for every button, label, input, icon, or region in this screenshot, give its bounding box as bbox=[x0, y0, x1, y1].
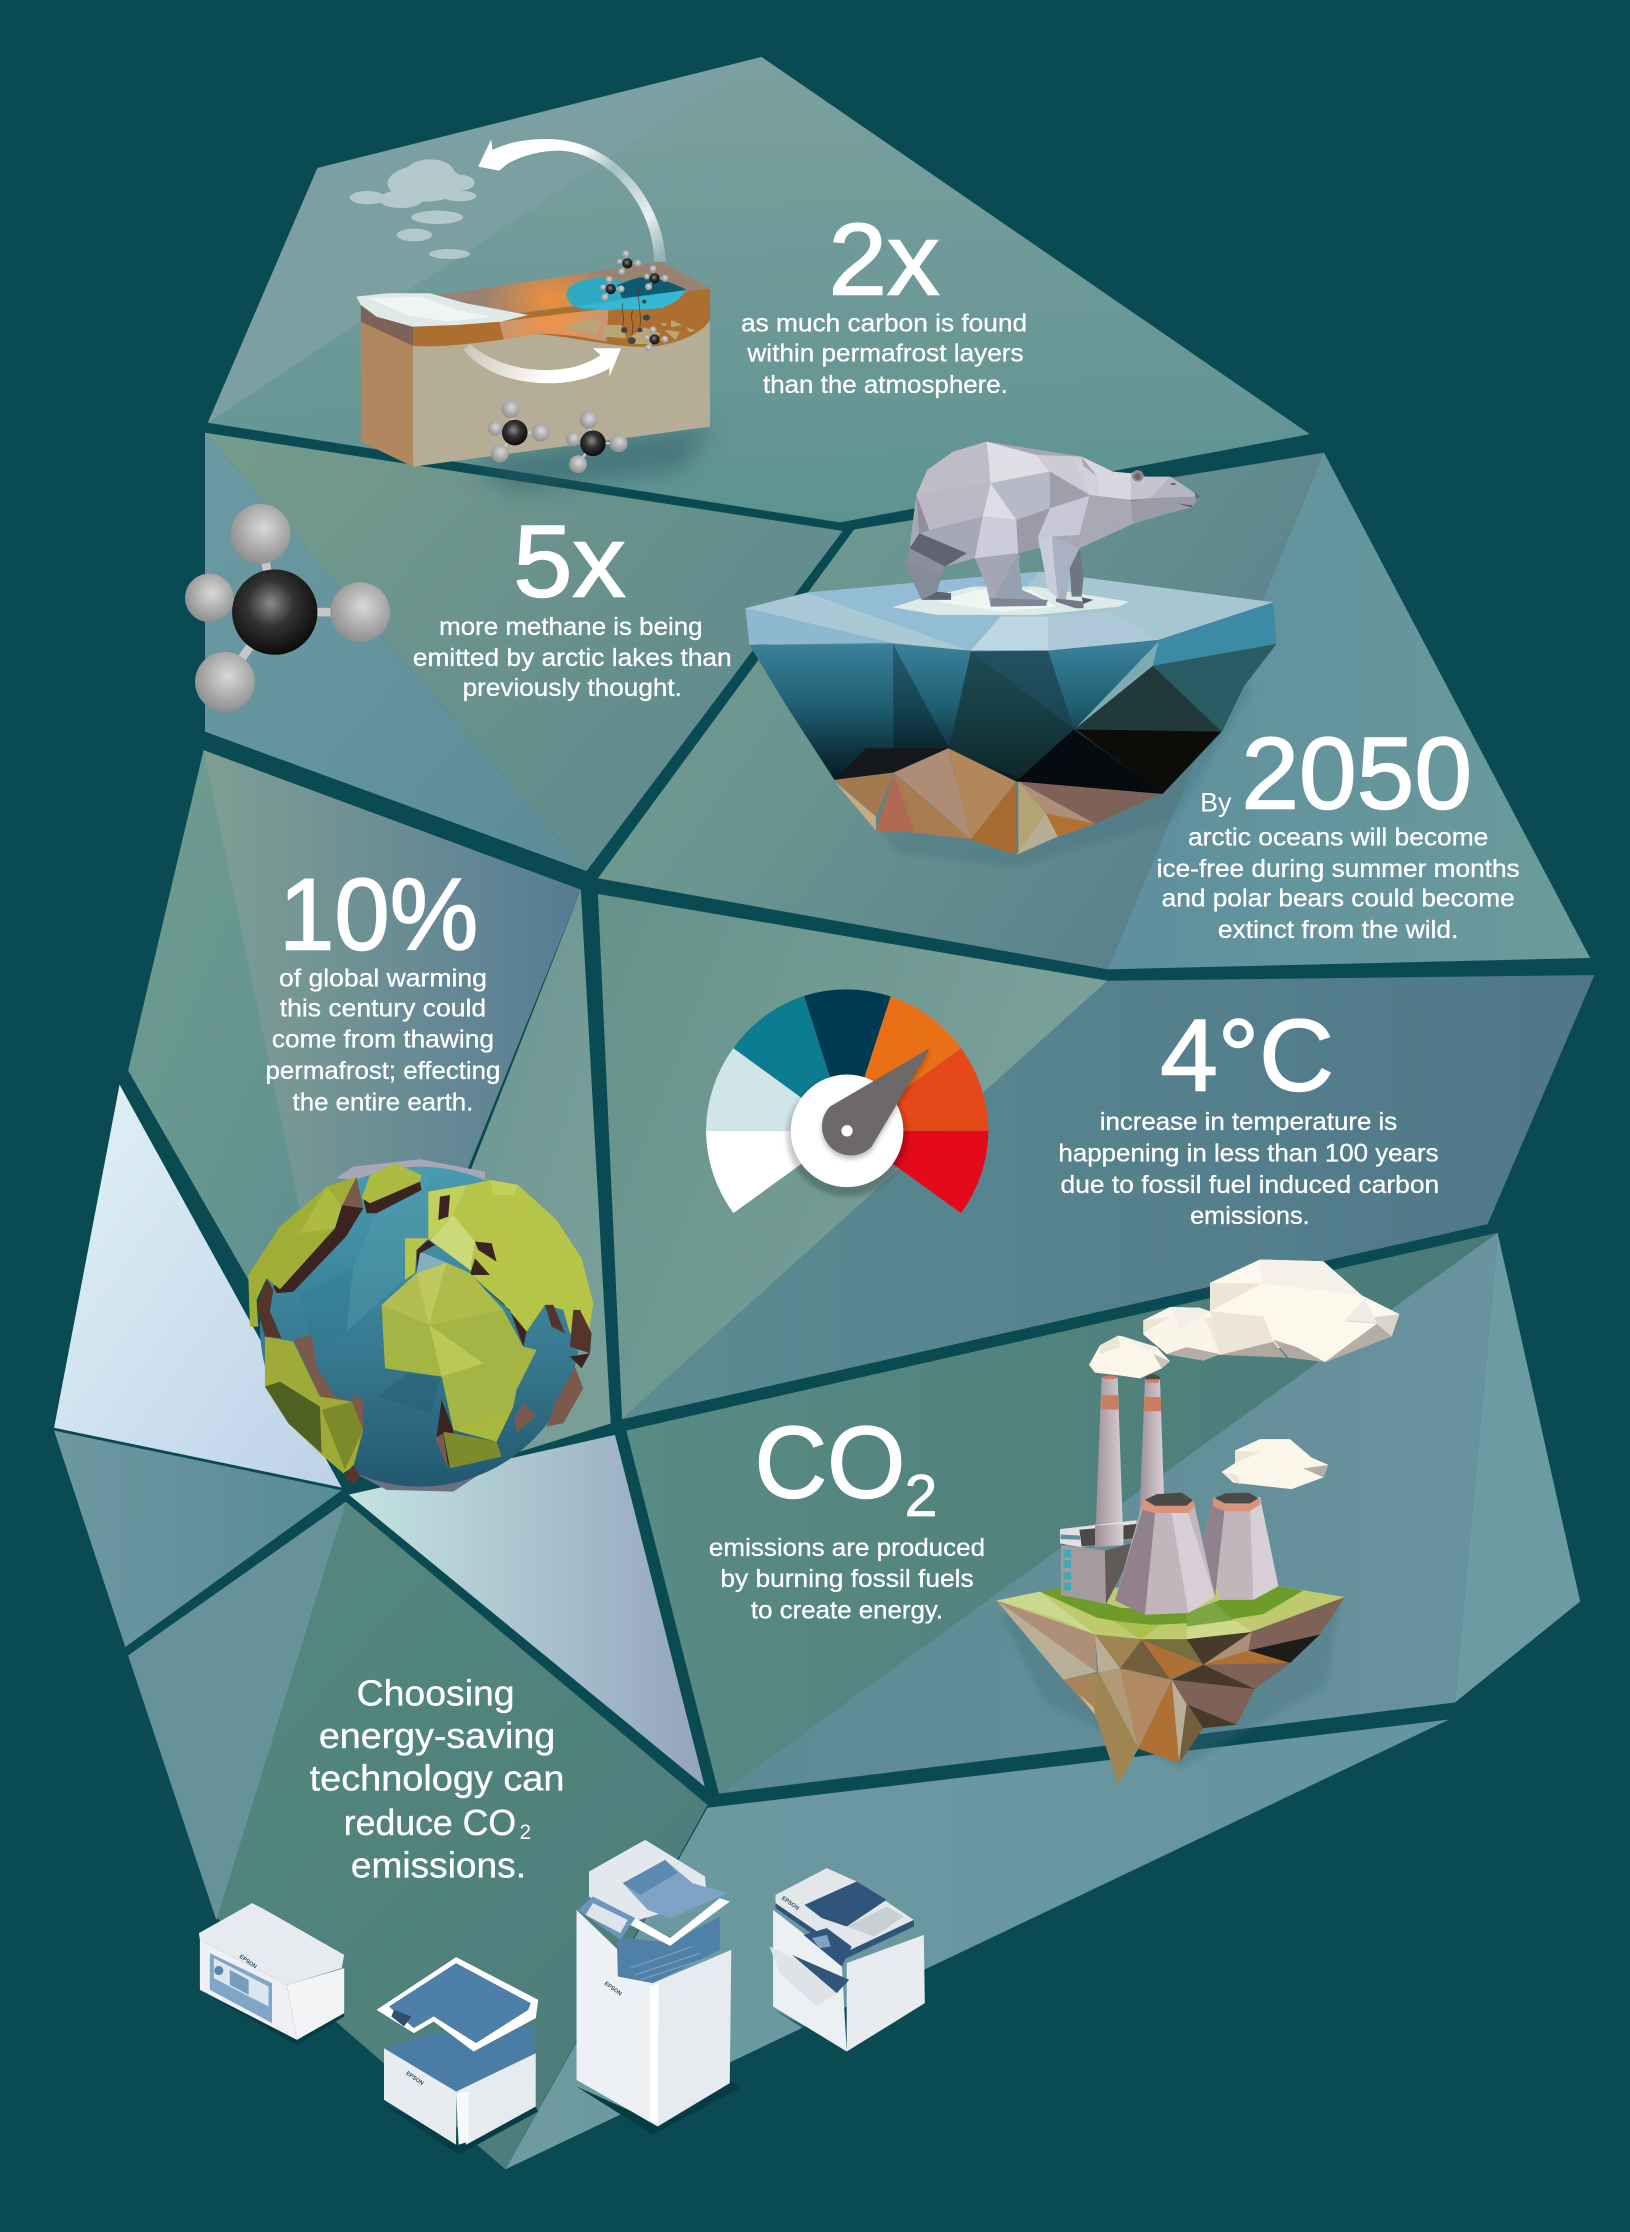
text: 5x methane: emitted by arctic lakes than bbox=[413, 644, 732, 672]
text: energy-saving technology: reduce CO bbox=[344, 1802, 516, 1843]
illustration: permafrost block bbox=[350, 139, 712, 491]
building bbox=[1060, 1520, 1138, 1604]
illustration: polar bear on iceberg bbox=[745, 442, 1276, 867]
icon: clouds bbox=[350, 159, 476, 259]
medium cloud bbox=[1089, 1307, 1220, 1378]
text: energy-saving technology: Choosing bbox=[357, 1672, 515, 1713]
panel: energy-saving technology bbox=[128, 1502, 1449, 2169]
printer brand labels: EPSON bbox=[238, 1954, 258, 1970]
text: 4°C temperature: happening in less than 100 years bbox=[1058, 1140, 1439, 1168]
icon: small methane molecules bbox=[488, 250, 668, 473]
cooling tower front bbox=[1115, 1493, 1215, 1615]
text: 10% global warming bbox=[265, 856, 500, 1116]
panel: polar bear bbox=[598, 453, 1590, 969]
text: CO2 emissions: by burning fossil fuels bbox=[720, 1565, 974, 1593]
icon: methane molecule bbox=[185, 504, 390, 712]
bear bbox=[906, 442, 1200, 608]
text: by 2050: ice-free during summer months bbox=[1157, 855, 1520, 883]
text: 4°C temperature: emissions. bbox=[1190, 1202, 1310, 1230]
text: 4°C temperature bbox=[1058, 997, 1439, 1230]
text: 10% global warming: the entire earth. bbox=[293, 1088, 473, 1116]
printer brand labels: EPSON bbox=[780, 1896, 800, 1912]
text: 5x methane: more methane is being bbox=[439, 613, 703, 641]
text: CO2 emissions bbox=[709, 1404, 985, 1624]
needle bbox=[822, 1048, 930, 1155]
ice bbox=[356, 293, 528, 327]
text: CO2 emissions: 2 bbox=[905, 1462, 937, 1529]
block faces bbox=[361, 322, 413, 467]
chimneys bbox=[1095, 1374, 1164, 1545]
text: 10% global warming: of global warming bbox=[279, 964, 487, 992]
illustration: power plant on floating island bbox=[997, 1259, 1399, 1784]
gauge sectors bbox=[706, 989, 988, 1213]
iceberg shadow bbox=[799, 687, 1254, 867]
illustration: office printers bbox=[199, 1840, 925, 2155]
printer 1 bbox=[199, 1903, 344, 2045]
text: energy-saving technology: energy-saving bbox=[319, 1715, 555, 1756]
island shadow bbox=[1000, 1604, 1340, 1768]
text: 5x methane bbox=[413, 503, 732, 702]
panel: permafrost carbon bbox=[208, 57, 1310, 522]
text: 4°C temperature: due to fossil fuel induced carbon bbox=[1061, 1171, 1439, 1199]
iceberg underside bbox=[749, 640, 1276, 794]
panel: lower left facet bbox=[54, 1431, 342, 1647]
text: 5x methane: 5x bbox=[513, 503, 626, 618]
panel: light facet left bbox=[54, 1085, 342, 1488]
panel: global warming bbox=[128, 750, 611, 1480]
ice patch bbox=[893, 587, 1129, 615]
text: 2x permafrost: within permafrost layers bbox=[746, 340, 1024, 368]
text: 4°C temperature: 4°C bbox=[1160, 997, 1334, 1112]
text: CO2 emissions: to create energy. bbox=[751, 1596, 943, 1624]
text: energy-saving technology: 2 bbox=[520, 1820, 531, 1844]
panel: temperature gauge bbox=[598, 894, 1594, 1419]
text: by 2050 bbox=[1157, 716, 1520, 944]
text: energy-saving technology bbox=[310, 1672, 564, 1886]
illustration: low-poly globe bbox=[248, 1159, 593, 1492]
text: 2x permafrost: than the atmosphere. bbox=[763, 371, 1008, 399]
text: by 2050: By bbox=[1200, 787, 1232, 817]
hub bbox=[787, 1077, 907, 1196]
text: energy-saving technology: emissions. bbox=[351, 1845, 526, 1886]
land: eurasia bbox=[405, 1180, 593, 1427]
printer brand labels: EPSON bbox=[405, 2071, 424, 2087]
printer brand labels: EPSON bbox=[603, 1981, 623, 1997]
text: energy-saving technology: technology can bbox=[310, 1758, 564, 1799]
text: 2x permafrost: 2x bbox=[829, 202, 940, 317]
land: africa bbox=[382, 1263, 537, 1468]
lake bbox=[567, 277, 687, 310]
text: by 2050: extinct from the wild. bbox=[1218, 916, 1458, 944]
bubbles bbox=[621, 300, 650, 344]
land: greenland bbox=[362, 1163, 422, 1213]
ocean bbox=[260, 1167, 580, 1487]
printer 4 bbox=[770, 1868, 925, 2056]
island grass bbox=[997, 1586, 1345, 1639]
printer 3 bbox=[577, 1840, 740, 2135]
text: CO2 emissions: CO bbox=[754, 1404, 905, 1519]
panel: CO2 bbox=[626, 1233, 1580, 1794]
iceberg rock bbox=[834, 748, 1161, 855]
polar ring bbox=[336, 1159, 485, 1182]
text: 10% global warming: come from thawing bbox=[272, 1026, 494, 1054]
large smoke cloud bbox=[1182, 1259, 1399, 1362]
lower arrow bbox=[463, 344, 621, 383]
panel: methane bbox=[205, 433, 843, 871]
illustration: temperature gauge bbox=[706, 989, 988, 1213]
icon: upward arrow bbox=[478, 139, 666, 262]
text: 10% global warming: permafrost; effecting bbox=[265, 1057, 500, 1085]
text: 5x methane: previously thought. bbox=[463, 674, 682, 702]
text: by 2050: and polar bears could become bbox=[1162, 885, 1515, 913]
cooling tower rear bbox=[1203, 1493, 1278, 1600]
land: north america bbox=[248, 1177, 363, 1338]
printer 2 bbox=[377, 1957, 538, 2155]
iceberg top bbox=[745, 572, 1276, 666]
text: 2x permafrost: as much carbon is found bbox=[741, 310, 1027, 338]
text: 10% global warming: 10% bbox=[279, 856, 478, 971]
small cloud bbox=[1222, 1439, 1328, 1489]
text: 4°C temperature: increase in temperature is bbox=[1100, 1108, 1397, 1136]
text: by 2050: arctic oceans will become bbox=[1188, 824, 1488, 852]
text: 10% global warming: this century could bbox=[280, 994, 486, 1022]
land: south america bbox=[265, 1335, 363, 1484]
text: 2x permafrost bbox=[741, 202, 1027, 399]
island underside bbox=[997, 1597, 1345, 1784]
printer brand labels bbox=[238, 1896, 800, 2087]
text: CO2 emissions: emissions are produced bbox=[709, 1534, 985, 1562]
text: by 2050: 2050 bbox=[1241, 716, 1472, 831]
shadow bbox=[470, 423, 712, 491]
panel: pale triangle bbox=[349, 1435, 705, 1786]
